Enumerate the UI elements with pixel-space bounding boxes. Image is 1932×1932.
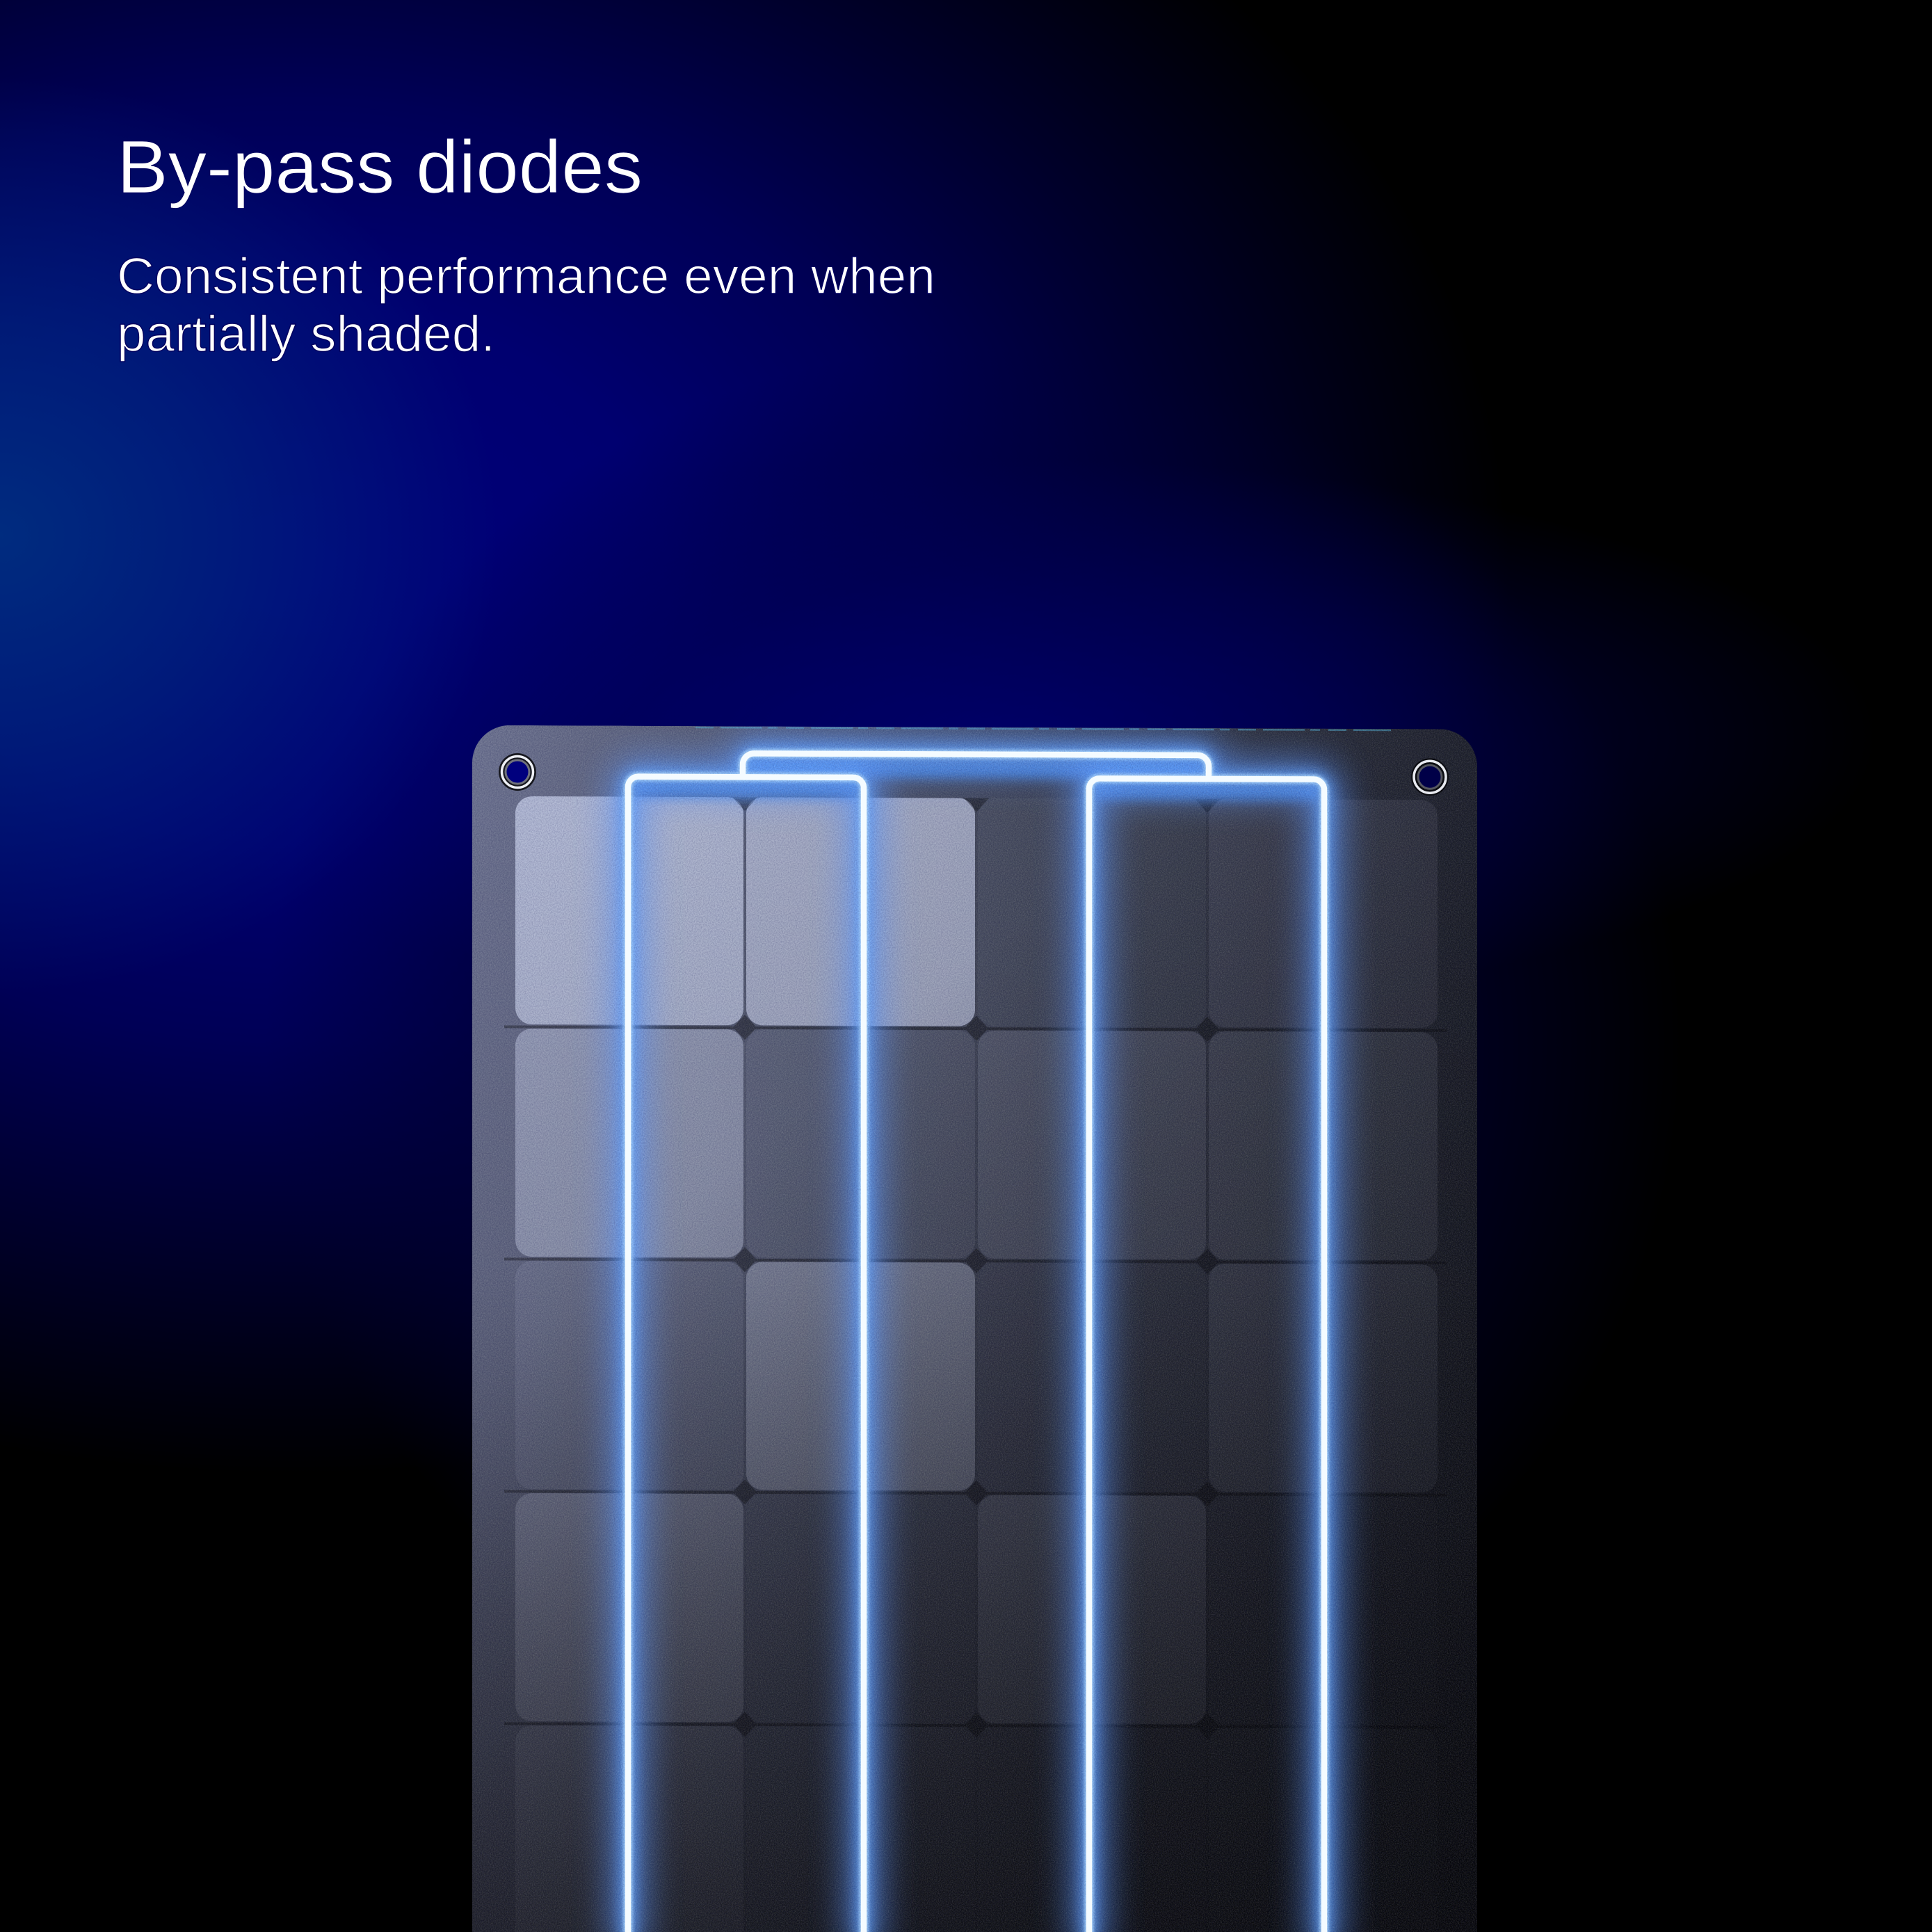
diagonal panel shading [472,886,1477,1932]
wire mid glow [628,753,1324,1932]
solar cell grid [515,796,1438,1932]
subtitle: partially shaded. [117,306,495,362]
light grain texture [472,725,1477,1932]
mounting hole left [499,753,536,791]
neon by-pass wires [628,753,1324,1932]
solar panel [472,725,1477,1932]
glow fill in wire tops [634,760,1319,800]
subtitle: Consistent performance even when [117,248,935,305]
wire inner halo [628,753,1324,1932]
cell junction diamonds and seams [504,796,1447,1739]
panel body [472,725,1477,1932]
dark grain texture [472,725,1477,1932]
mounting hole right [1411,758,1449,796]
subtitle [117,248,935,362]
top edge highlight [695,727,1391,730]
wire outer glow [628,753,1324,1932]
vertical panel shading [472,890,1477,1932]
title: By-pass diodes [117,124,643,209]
